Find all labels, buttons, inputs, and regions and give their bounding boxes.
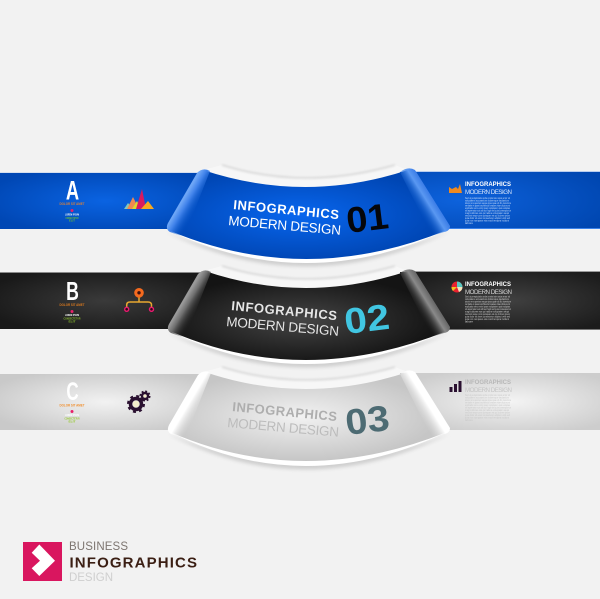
ribbon title 01	[228, 197, 342, 238]
right text block: magni dolores eos qui ratione voluptatem sequi	[465, 310, 509, 314]
panel: blue band 01	[0, 165, 600, 266]
right text block: Sed ut perspiciatis unde omnis iste natus error sit	[465, 294, 510, 298]
number 03: 03	[343, 397, 392, 443]
right text block: MODERN DESIGN	[465, 289, 512, 296]
right text block: voluptatem accusantium doloremque laudantium	[465, 396, 509, 400]
left label B: B	[66, 277, 79, 306]
grey left fold	[168, 371, 211, 439]
logo text: DESIGN	[69, 572, 113, 584]
right text block: INFOGRAPHICS	[465, 282, 511, 288]
black ribbon	[170, 271, 447, 360]
right text block: labore	[465, 418, 474, 422]
ribbon title 02: INFOGRAPHICS	[231, 298, 338, 323]
blue strip right	[400, 172, 600, 229]
right text block	[465, 182, 512, 225]
right text block: explicabo nemo enim ipsam voluptatem quia voluptas	[465, 206, 511, 210]
left label C: LOREM IPSUM	[65, 413, 79, 417]
right text block: veritatis et quasi architecto beatae vitae dicta sunt	[465, 400, 510, 404]
icon: colored pie	[451, 282, 462, 292]
right text block: totam rem aperiam eaque ipsa quae ab illo inventore	[465, 201, 511, 205]
right text block: explicabo nemo enim ipsam voluptatem quia voluptas	[465, 403, 511, 407]
grey right fold	[400, 370, 450, 438]
grey strip left	[0, 374, 210, 430]
arc above blue ribbon	[203, 165, 408, 187]
left label C: ELIT	[68, 420, 76, 424]
left label A: CONSECTETUR	[66, 216, 78, 220]
icon: bar chart	[450, 381, 462, 392]
blue ribbon rim	[166, 229, 449, 266]
arc above grey ribbon	[203, 367, 408, 389]
number 01: 01	[344, 195, 391, 241]
right text block: Sed ut perspiciatis unde omnis iste natus error sit	[465, 196, 510, 200]
right text block: MODERN DESIGN	[465, 189, 512, 196]
right text block: totam rem aperiam eaque ipsa quae ab illo inventore	[465, 300, 511, 304]
right text block: labore	[465, 221, 474, 225]
ribbon title 02: MODERN DESIGN	[226, 314, 340, 339]
left label B: ELIT	[68, 320, 76, 324]
right text block: quia dolor sit amet consectetur adipisci velit sed	[465, 314, 510, 318]
right text block: labore	[465, 320, 474, 324]
right text block	[465, 282, 512, 324]
right text block: INFOGRAPHICS	[465, 380, 511, 386]
logo text: BUSINESS	[69, 541, 128, 553]
right text block: nesciunt neque porro quisquam est qui dolorem ipsum	[465, 214, 510, 218]
ribbon title 03: INFOGRAPHICS	[232, 399, 338, 424]
right text block: nesciunt neque porro quisquam est qui dolorem ipsum	[465, 410, 510, 414]
right text block: quia non numquam eius modi tempora incidunt	[465, 218, 509, 222]
left label B: LOREM IPSUM	[65, 313, 79, 317]
ribbon title 01: INFOGRAPHICS	[233, 197, 340, 222]
ribbon title 01: MODERN DESIGN	[228, 213, 342, 238]
right text block: sit aspernatur aut odit aut fugit sed quia consequuntur	[465, 208, 511, 212]
right text block: quia non numquam eius modi tempora incidunt	[465, 317, 509, 321]
icon: mountains	[124, 189, 154, 209]
black ribbon rim	[168, 330, 449, 368]
left label C	[60, 378, 85, 424]
left label A: DOLOR SIT AMET	[60, 202, 85, 206]
black strip left	[0, 273, 210, 329]
logo text: INFOGRAPHICS	[70, 554, 197, 572]
left label A: LOREM IPSUM	[65, 212, 79, 216]
left label C: DOLOR SIT AMET	[60, 404, 85, 408]
icon: tree diagram	[125, 288, 154, 311]
right text block: veritatis et quasi architecto beatae vitae dicta sunt	[465, 204, 510, 208]
icon: area chart	[449, 184, 462, 193]
number 02: 02	[342, 296, 392, 342]
black left fold	[168, 270, 211, 338]
right text block: quia dolor sit amet consectetur adipisci velit sed	[465, 413, 510, 417]
right text block	[465, 380, 512, 422]
right text block: magni dolores eos qui ratione voluptatem sequi	[465, 408, 509, 412]
right text block: explicabo nemo enim ipsam voluptatem quia voluptas	[465, 304, 511, 308]
icon: pink square with chevron	[23, 542, 62, 581]
ribbon title 03	[227, 399, 340, 440]
right text block: sit aspernatur aut odit aut fugit sed quia consequuntur	[465, 307, 511, 311]
logo text	[69, 541, 197, 584]
left label C: C	[66, 378, 79, 406]
grey ribbon rim	[168, 431, 449, 470]
blue right fold	[400, 168, 450, 236]
ribbon title 02	[226, 298, 340, 339]
left label B: CONSECTETUR	[64, 316, 80, 320]
left label B	[60, 277, 85, 324]
right text block: Sed ut perspiciatis unde omnis iste natus error sit	[465, 393, 510, 397]
left label A: A	[66, 175, 79, 205]
right text block: veritatis et quasi architecto beatae vitae dicta sunt	[465, 302, 510, 306]
panel: grey band 03	[0, 367, 600, 470]
left label C: CONSECTETUR	[64, 416, 80, 420]
blue ribbon	[168, 170, 447, 259]
black right fold	[400, 269, 450, 337]
right text block: nesciunt neque porro quisquam est qui dolorem ipsum	[465, 312, 510, 316]
right text block: sit aspernatur aut odit aut fugit sed quia consequuntur	[465, 406, 511, 410]
logo block	[23, 541, 197, 584]
blue strip left	[0, 173, 210, 229]
left label B: DOLOR SIT AMET	[60, 303, 85, 307]
right text block: quia non numquam eius modi tempora incidunt	[465, 416, 509, 420]
right text block: MODERN DESIGN	[465, 387, 512, 394]
left label A: ELIT	[69, 220, 76, 222]
icon: gears	[128, 391, 150, 412]
ribbon title 03: MODERN DESIGN	[227, 415, 340, 440]
grey ribbon	[170, 372, 447, 461]
blue left fold	[167, 169, 210, 237]
right text block: voluptatem accusantium doloremque laudantium	[465, 198, 509, 202]
right text block: voluptatem accusantium doloremque laudantium	[465, 297, 509, 301]
panel: black band 02	[0, 266, 600, 368]
right text block: quia dolor sit amet consectetur adipisci velit sed	[465, 216, 510, 220]
arc above black ribbon	[203, 266, 408, 288]
black strip right	[400, 272, 600, 329]
right text block: magni dolores eos qui ratione voluptatem sequi	[465, 211, 509, 215]
left label A	[60, 175, 85, 222]
grey strip right	[400, 373, 600, 430]
right text block: totam rem aperiam eaque ipsa quae ab illo inventore	[465, 398, 511, 402]
right text block: INFOGRAPHICS	[465, 182, 511, 188]
